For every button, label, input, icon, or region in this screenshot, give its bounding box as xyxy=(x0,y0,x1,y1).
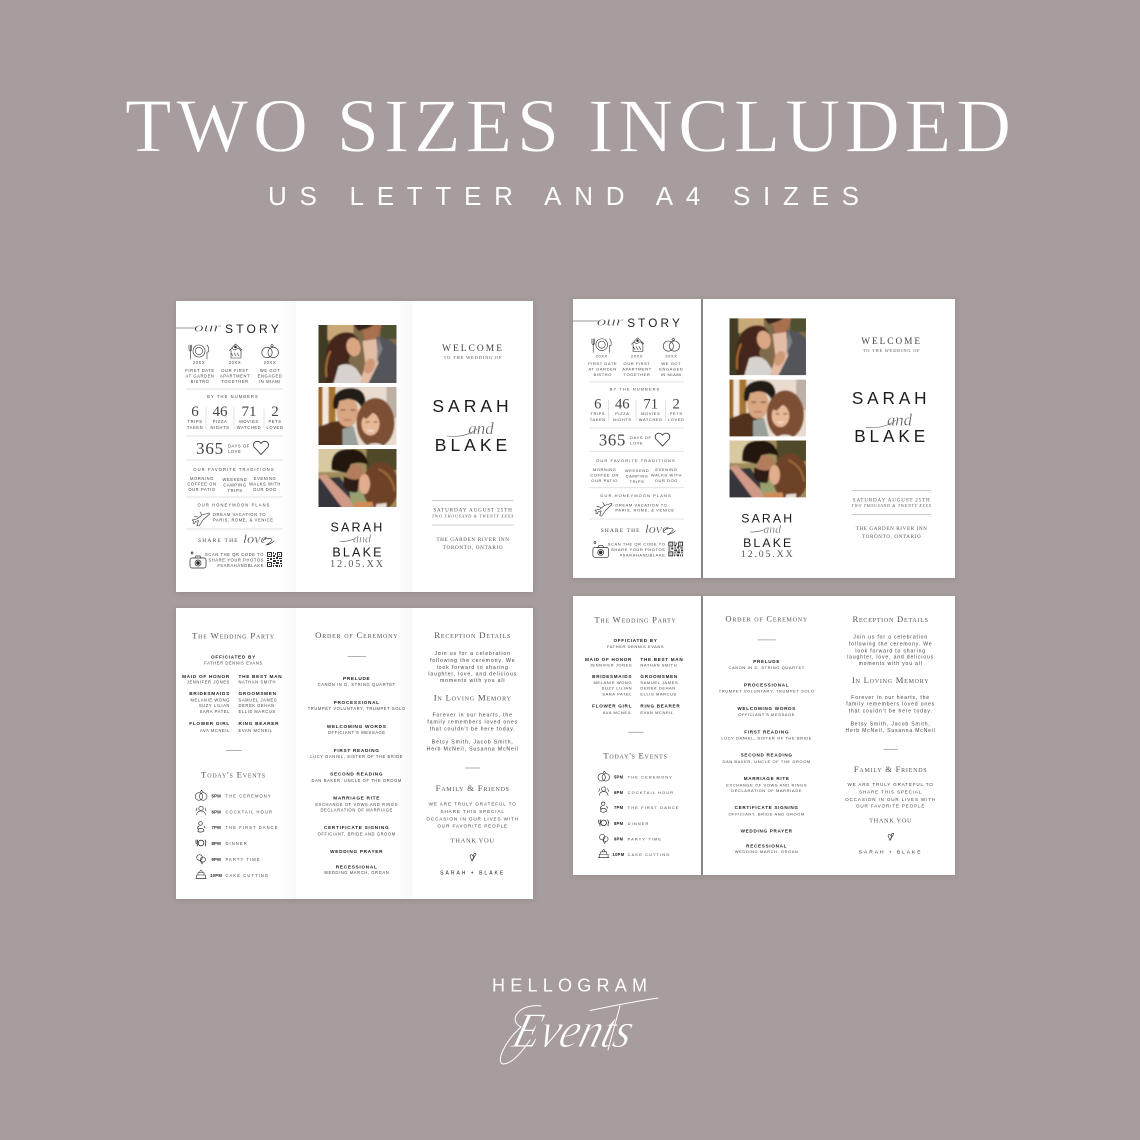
order of ceremony: FIRST READING xyxy=(334,748,380,753)
wedding party and events: 7PM xyxy=(212,825,221,830)
welcome column: THE GARDEN RIVER INN xyxy=(436,537,510,543)
our story column: EVENING xyxy=(254,476,276,481)
our story column: WEEKEND xyxy=(625,468,649,473)
order of ceremony: CANON IN D, STRING QUARTET xyxy=(728,665,805,670)
our story column: TOGETHER xyxy=(221,379,249,384)
our story column: DAYS OF xyxy=(228,444,250,448)
reception column: OUR FAVORITE PEOPLE xyxy=(437,824,508,828)
wedding party and events: 7PM xyxy=(614,805,624,810)
our story column: love xyxy=(645,522,669,536)
our story column xyxy=(176,320,283,568)
wedding party and events: 6PM xyxy=(614,790,624,795)
reception column: Betsy Smith, Jacob Smith, xyxy=(851,721,931,727)
wedding party and events: 8PM xyxy=(614,821,624,826)
welcome column xyxy=(851,337,932,540)
reception column: WE ARE TRULY GRATEFUL TO xyxy=(429,802,517,806)
order of ceremony: DECLARATION OF MARRIAGE xyxy=(731,788,802,793)
our story column: PIZZA xyxy=(615,411,629,416)
our story column: APARTMENT xyxy=(220,374,250,378)
welcome column: TWO THOUSAND & TWENTY XXXX xyxy=(432,514,514,518)
reception column: Herb McNeil, Susanna McNeil xyxy=(427,746,519,752)
panel: US letter back xyxy=(176,608,533,899)
wedding party and events: FATHER DENNIS EVANS xyxy=(204,660,263,666)
reception column: OCCASION IN OUR LIVES WITH xyxy=(426,816,519,822)
names small: and xyxy=(763,523,781,536)
wedding party and events: Today's Events xyxy=(201,770,266,780)
subtitle: US LETTER AND A4 SIZES xyxy=(268,181,859,211)
welcome column: and xyxy=(887,410,913,429)
order of ceremony: CERTIFICATE SIGNING xyxy=(735,805,799,810)
our story column: SHARE YOUR PHOTOS xyxy=(611,547,665,552)
our story column: SCAN THE QR CODE TO xyxy=(205,552,264,557)
wedding party and events: DEREK DEHAN xyxy=(640,686,676,691)
order of ceremony: DAN BAKER, UNCLE OF THE GROOM xyxy=(312,778,402,783)
wedding party and events: BRIDESMAIDS xyxy=(189,691,230,696)
wedding party and events: 9PM xyxy=(614,837,624,842)
order of ceremony: SECOND READING xyxy=(330,772,383,776)
wedding party and events: FATHER DENNIS EVANS xyxy=(607,644,664,649)
wedding party and events: MAID OF HONOR xyxy=(182,674,230,679)
order of ceremony: WELCOMING WORDS xyxy=(737,706,796,711)
our story column: 71 xyxy=(242,404,256,420)
reception column: Forever in our hearts, the xyxy=(851,695,930,701)
our story column: SCAN THE QR CODE TO xyxy=(608,542,665,547)
wedding party and events: AVA MCNEIL xyxy=(603,710,632,715)
wedding party and events: COCKTAIL HOUR xyxy=(226,810,273,814)
wedding party and events: THE CEREMONY xyxy=(226,794,272,798)
wedding party and events: 5PM xyxy=(614,774,624,779)
wedding party and events: RING BEARER xyxy=(238,721,279,726)
logo: Hellogram Events xyxy=(492,976,658,1064)
our story column: TRIPS xyxy=(187,419,203,424)
wedding party and events: THE FIRST DANCE xyxy=(226,825,279,830)
reception column: SHARE THIS SPECIAL xyxy=(859,789,922,794)
names small: 12.05.XX xyxy=(741,549,795,560)
order of ceremony xyxy=(719,614,815,854)
order of ceremony: CANON IN D, STRING QUARTET xyxy=(318,682,396,687)
reception column xyxy=(426,630,519,876)
our story column: 20XX xyxy=(596,353,608,358)
reception column: following the ceremony. We xyxy=(849,641,932,647)
our story column: OUR FAVORITE TRADITIONS xyxy=(596,458,676,463)
our story column: 71 xyxy=(643,396,658,412)
wedding party and events: THE FIRST DANCE xyxy=(628,805,680,810)
wedding party and events xyxy=(585,614,683,858)
wedding party and events: EVAN MCNEIL xyxy=(238,728,273,733)
our story column: MORNING xyxy=(190,476,214,481)
welcome column: TO THE WEDDING OF xyxy=(444,355,502,360)
our story column: IN MIAMI xyxy=(661,372,682,377)
wedding party and events: Today's Events xyxy=(603,751,668,761)
our story column: OUR FAVORITE TRADITIONS xyxy=(193,467,275,472)
names small: BLAKE xyxy=(743,536,793,550)
welcome column: TWO THOUSAND & TWENTY XXXX xyxy=(851,503,932,508)
welcome column: BLAKE xyxy=(435,435,511,455)
reception column: WE ARE TRULY GRATEFUL TO xyxy=(848,782,934,787)
logo script: Events xyxy=(506,1004,640,1059)
our story column: WATCHED xyxy=(639,417,663,422)
our story column: #SARAHANDBLAKE xyxy=(620,552,665,557)
our story column: OUR PATIO xyxy=(188,487,216,492)
order of ceremony: OFFICIANT'S MESSAGE xyxy=(738,712,795,717)
our story column: 2 xyxy=(673,396,680,412)
reception column: Herb McNeil, Susanna McNeil xyxy=(846,728,936,734)
order of ceremony: WEDDING PRAYER xyxy=(330,849,383,854)
wedding party and events: BRIDESMAIDS xyxy=(592,674,632,679)
our story column: BY THE NUMBERS xyxy=(207,394,259,399)
reception column: that couldn't be here today. xyxy=(430,726,516,732)
reception column: that couldn't be here today. xyxy=(849,709,933,715)
our story column: TAKEN xyxy=(187,425,203,430)
panel: A4 back xyxy=(573,596,955,875)
wedding party and events: 5PM xyxy=(212,794,221,798)
order of ceremony: EXCHANGE OF VOWS AND RINGS xyxy=(726,782,807,787)
wedding party and events: SAMUEL JAMES xyxy=(238,698,277,702)
welcome column: SATURDAY AUGUST 25TH xyxy=(853,497,930,503)
welcome column: WELCOME xyxy=(861,337,922,347)
sheet xyxy=(176,608,533,899)
reception column: laughter, love, and delicious xyxy=(428,672,517,678)
wedding party and events: NATHAN SMITH xyxy=(238,680,276,684)
reception column: family remembers loved ones xyxy=(427,720,518,726)
names small: and xyxy=(353,532,372,546)
wedding party and events: ELLIS MARCUS xyxy=(238,709,276,714)
our story column: NIGHTS xyxy=(210,425,230,430)
wedding party and events: PARTY TIME xyxy=(628,837,662,842)
names small xyxy=(741,511,795,560)
welcome column: TORONTO, ONTARIO xyxy=(443,545,503,551)
sheet xyxy=(573,596,955,875)
our story column: NIGHTS xyxy=(613,417,632,422)
names small: SARAH xyxy=(330,520,385,534)
reception column: OUR FAVORITE PEOPLE xyxy=(856,804,925,809)
our story column: OUR FIRST xyxy=(221,368,249,373)
wedding party and events: MELANIE WONG xyxy=(593,680,632,685)
our story column: OUR HONEYMOON PLANS xyxy=(600,493,672,498)
our story column: 365 xyxy=(599,431,626,450)
order of ceremony: WEDDING MARCH, ORGAN xyxy=(324,870,389,875)
reception column: In Loving Memory xyxy=(434,692,512,702)
photos xyxy=(727,315,810,501)
wedding party and events: THE CEREMONY xyxy=(628,774,673,779)
our story column: BISTRO xyxy=(593,372,612,377)
order of ceremony: TRUMPET VOLUNTARY, TRUMPET SOLO xyxy=(308,706,406,711)
our story column: TOGETHER xyxy=(624,372,650,377)
wedding party and events: JENNIFER JONES xyxy=(187,680,230,684)
our story column: TAKEN xyxy=(590,417,606,422)
wedding party and events: FLOWER GIRL xyxy=(189,721,230,726)
order of ceremony: OFFICIANT, BRIDE AND GROOM xyxy=(318,832,396,836)
our story column: OUR HONEYMOON PLANS xyxy=(198,502,270,508)
order of ceremony: OFFICIANT, BRIDE AND GROOM xyxy=(728,811,805,816)
our story column: WE GOT xyxy=(661,361,681,366)
our story column: WATCHED xyxy=(237,425,261,430)
order of ceremony: RECESSIONAL xyxy=(746,844,787,849)
order of ceremony: PRELUDE xyxy=(753,659,780,664)
our story column: PETS xyxy=(268,419,282,424)
wedding party and events: CAKE CUTTING xyxy=(226,873,269,878)
order of ceremony: SECOND READING xyxy=(741,752,793,757)
our story column: 365 xyxy=(196,439,224,458)
welcome column xyxy=(432,344,514,551)
order of ceremony: DECLARATION OF MARRIAGE xyxy=(320,808,393,812)
wedding party and events xyxy=(182,630,282,878)
welcome column: TO THE WEDDING OF xyxy=(863,348,920,353)
our story column: AT GARDEN xyxy=(186,374,214,378)
logo wordmark: HELLOGRAM xyxy=(492,976,647,996)
wedding party and events: SUZY LILIAN xyxy=(602,686,632,691)
order of ceremony: PROCESSIONAL xyxy=(334,700,380,705)
wedding party and events: 8PM xyxy=(212,841,221,846)
our story column: PIZZA xyxy=(213,419,227,424)
wedding party and events: SAMUEL JAMES xyxy=(640,680,678,685)
reception column: Family & Friends xyxy=(436,783,510,793)
welcome column: BLAKE xyxy=(854,426,929,446)
wedding party and events: SARA PATEL xyxy=(200,709,230,714)
our story column: our xyxy=(194,320,222,334)
welcome column: THE GARDEN RIVER INN xyxy=(856,526,928,532)
our story column: APARTMENT xyxy=(622,367,652,372)
order of ceremony: Order of Ceremony xyxy=(725,614,808,624)
our story column: BISTRO xyxy=(191,379,209,384)
order of ceremony: Order of Ceremony xyxy=(315,630,398,640)
order of ceremony: MARRIAGE RITE xyxy=(744,776,790,781)
our story column: OUR DOG xyxy=(655,478,678,483)
our story column: CAMPING xyxy=(223,482,247,488)
our story column: OUR PATIO xyxy=(591,478,618,483)
wedding party and events: GROOMSMEN xyxy=(640,674,678,679)
our story column: FIRST DATE xyxy=(588,361,617,366)
our story column: 20XX xyxy=(631,353,643,358)
wedding party and events: EVAN MCNEIL xyxy=(640,710,674,715)
our story column: FIRST DATE xyxy=(185,368,215,373)
reception column: following the ceremony. We xyxy=(430,658,515,664)
our story column: MOVIES xyxy=(641,411,660,416)
our story column xyxy=(573,315,684,557)
our story column: LOVED xyxy=(668,417,684,422)
title: TWO SIZES INCLUDED xyxy=(125,84,1011,168)
order of ceremony: WEDDING MARCH, ORGAN xyxy=(735,849,799,854)
welcome column: WELCOME xyxy=(442,344,504,354)
our story column: PARIS, ROME, & VENICE xyxy=(213,518,274,522)
our story column: SHARE THE xyxy=(198,538,239,544)
order of ceremony: WELCOMING WORDS xyxy=(327,724,387,729)
our story column: STORY xyxy=(627,317,683,330)
order of ceremony: TRUMPET VOLUNTARY, TRUMPET SOLO xyxy=(719,688,815,693)
wedding party and events: THE BEST MAN xyxy=(640,657,683,662)
wedding party and events: MELANIE WONG xyxy=(190,698,230,702)
order of ceremony xyxy=(308,630,406,875)
names small xyxy=(330,520,385,570)
wedding party and events: THE BEST MAN xyxy=(238,674,282,679)
welcome column: and xyxy=(468,419,494,438)
wedding party and events: DINNER xyxy=(226,841,248,846)
our story column: DAYS OF xyxy=(630,435,652,440)
panel: A4 front xyxy=(573,299,955,578)
wedding party and events: OFFICIATED BY xyxy=(613,638,658,643)
wedding party and events: The Wedding Party xyxy=(594,614,677,624)
order of ceremony: MARRIAGE RITE xyxy=(333,796,380,800)
reception column: Join us for a celebration xyxy=(853,635,928,641)
our story column: TRIPS xyxy=(227,488,243,493)
reception column: SARAH + BLAKE xyxy=(859,850,922,856)
our story column: 46 xyxy=(615,396,630,412)
welcome column: TORONTO, ONTARIO xyxy=(862,534,921,540)
wedding party and events: PARTY TIME xyxy=(226,857,261,862)
reception column: moments with you all xyxy=(440,678,505,684)
order of ceremony: LUCY DANIEL, SISTER OF THE BRIDE xyxy=(721,735,812,740)
wedding party and events: GROOMSMEN xyxy=(238,691,277,696)
reception column: Reception Details xyxy=(852,614,929,624)
logo flourish xyxy=(500,998,658,1064)
reception column: moments with you all xyxy=(859,661,923,667)
our story column: COFFEE ON xyxy=(590,472,619,477)
names small: SARAH xyxy=(741,511,794,525)
our story column: STORY xyxy=(225,322,282,336)
our story column: DREAM VACATION TO xyxy=(615,502,667,507)
order of ceremony: OFFICIANT'S MESSAGE xyxy=(328,730,386,735)
reception column: look forward to sharing xyxy=(855,648,926,654)
welcome column: SATURDAY AUGUST 25TH xyxy=(433,508,513,514)
our story column: WALKS WITH xyxy=(249,482,281,486)
our story column: 20XX xyxy=(665,353,677,358)
order of ceremony: FIRST READING xyxy=(744,729,789,734)
our story column: love xyxy=(243,531,267,546)
wedding party and events: NATHAN SMITH xyxy=(640,663,677,668)
our story column: 46 xyxy=(212,404,228,420)
wedding party and events: AVA MCNEIL xyxy=(200,728,230,733)
our story column: OUR FIRST xyxy=(624,361,650,366)
our story column: 6 xyxy=(594,396,601,412)
wedding party and events: 10PM xyxy=(210,873,222,878)
welcome column: SARAH xyxy=(852,388,930,408)
panel: US letter front xyxy=(176,301,533,592)
reception column: THANK YOU xyxy=(869,817,912,824)
wedding party and events: CAKE CUTTING xyxy=(628,852,670,857)
our story column: EVENING xyxy=(655,467,677,472)
our story column: IN MIAMI xyxy=(259,379,281,384)
our story column: TRIPS xyxy=(590,411,605,416)
reception column: Reception Details xyxy=(434,630,511,640)
reception column: Join us for a celebration xyxy=(435,651,511,657)
our story column: LOVE xyxy=(630,441,643,446)
wedding party and events: 6PM xyxy=(212,810,221,814)
wedding party and events: FLOWER GIRL xyxy=(592,703,632,708)
our story column: COFFEE ON xyxy=(187,482,217,486)
names small: BLAKE xyxy=(332,546,384,560)
our story column: CAMPING xyxy=(626,473,648,478)
order of ceremony: LUCY DANIEL, SISTER OF THE BRIDE xyxy=(310,754,403,759)
our story column: OUR DOG xyxy=(253,487,277,492)
reception column: THANK YOU xyxy=(451,838,495,844)
sheet xyxy=(176,301,533,592)
photos xyxy=(316,322,400,511)
wedding party and events: ELLIS MARCUS xyxy=(640,691,677,696)
welcome column: SARAH xyxy=(432,396,513,416)
reception column: Forever in our hearts, the xyxy=(433,712,513,718)
our story column: LOVE xyxy=(228,449,241,454)
our story column: WE GOT xyxy=(260,368,280,373)
our story column: 2 xyxy=(271,404,279,420)
order of ceremony: EXCHANGE OF VOWS AND RINGS xyxy=(315,802,398,807)
sheet xyxy=(573,299,955,578)
wedding party and events: MAID OF HONOR xyxy=(585,657,632,662)
wedding party and events: SUZY LILIAN xyxy=(199,703,230,708)
our story column: DREAM VACATION TO xyxy=(213,512,266,517)
our story column: SHARE YOUR PHOTOS xyxy=(208,558,264,562)
order of ceremony: RECESSIONAL xyxy=(336,864,378,870)
wedding party and events: SARA PATEL xyxy=(602,691,632,696)
wedding party and events: 10PM xyxy=(613,852,625,857)
our story column: 6 xyxy=(191,404,199,420)
reception column: Betsy Smith, Jacob Smith, xyxy=(432,740,514,746)
our story column: SHARE THE xyxy=(601,528,641,534)
wedding party and events: COCKTAIL HOUR xyxy=(628,790,674,795)
our story column: our xyxy=(597,315,623,329)
our story column: LOVED xyxy=(267,425,283,430)
names small: 12.05.XX xyxy=(330,559,385,570)
our story column: ENGAGED xyxy=(659,367,683,372)
reception column: Family & Friends xyxy=(854,764,927,774)
our story column: 20XX xyxy=(193,360,205,365)
reception column: OCCASION IN OUR LIVES WITH xyxy=(845,797,936,802)
reception column: SARAH + BLAKE xyxy=(440,870,505,876)
wedding party and events: The Wedding Party xyxy=(192,630,275,640)
our story column: MOVIES xyxy=(239,419,259,424)
reception column: look forward to sharing xyxy=(437,665,509,671)
our story column: TRIPS xyxy=(630,479,644,484)
our story column: #SARAHANDBLAKE xyxy=(217,563,264,568)
reception column: family remembers loved ones xyxy=(846,702,935,708)
our story column: PETS xyxy=(670,411,683,416)
order of ceremony: PROCESSIONAL xyxy=(744,682,789,687)
our story column: ENGAGED xyxy=(258,374,282,378)
reception column: In Loving Memory xyxy=(852,675,929,685)
our story column: MORNING xyxy=(593,467,616,472)
our story column: 20XX xyxy=(264,360,276,365)
order of ceremony: WEDDING PRAYER xyxy=(741,828,793,833)
order of ceremony: CERTIFICATE SIGNING xyxy=(324,825,389,830)
order of ceremony: PRELUDE xyxy=(343,676,370,681)
reception column: SHARE THIS SPECIAL xyxy=(441,809,505,814)
wedding party and events: DEREK DEHAN xyxy=(238,703,275,708)
wedding party and events: RING BEARER xyxy=(640,703,680,708)
wedding party and events: DINNER xyxy=(628,821,650,826)
our story column: BY THE NUMBERS xyxy=(610,387,660,392)
reception column xyxy=(845,614,936,856)
our story column: AT GARDEN xyxy=(589,367,617,372)
our story column: 20XX xyxy=(229,360,241,365)
our story column: WEEKEND xyxy=(223,477,247,482)
our story column: PARIS, ROME, & VENICE xyxy=(615,508,675,513)
wedding party and events: 9PM xyxy=(212,857,221,862)
wedding party and events: OFFICIATED BY xyxy=(211,654,256,660)
reception column: laughter, love, and delicious xyxy=(847,655,934,661)
wedding party and events: JENNIFER JONES xyxy=(590,663,632,668)
order of ceremony: DAN BAKER, UNCLE OF THE GROOM xyxy=(723,759,811,764)
our story column: WALKS WITH xyxy=(651,472,682,477)
